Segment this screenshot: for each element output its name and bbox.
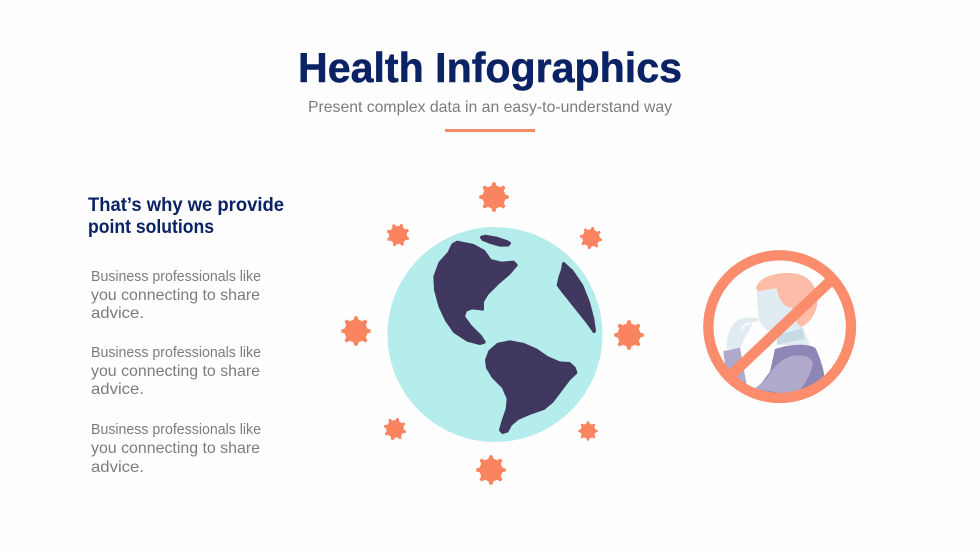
icon: virus left xyxy=(341,316,371,346)
icon: virus bottom xyxy=(476,455,506,485)
continent: greenland xyxy=(482,236,509,245)
text block 3 xyxy=(91,421,261,476)
prohibition slash xyxy=(732,280,831,374)
continent: north america xyxy=(435,242,516,343)
icon: virus top xyxy=(479,182,509,212)
title: Health Infographics xyxy=(298,44,682,91)
text block 1: Business professionals like xyxy=(91,268,261,285)
prohibition ring xyxy=(708,255,851,398)
icon: no-contact prohibition sign xyxy=(708,255,851,398)
icon: virus upper right xyxy=(578,225,604,251)
subtitle: Present complex data in an easy-to-understand way xyxy=(308,99,672,116)
title underline xyxy=(445,129,535,132)
heading: point solutions: That’s why we provide xyxy=(88,194,284,216)
continent: africa edge xyxy=(558,264,594,331)
icon: globe xyxy=(388,227,602,442)
text block 1: you connecting to share xyxy=(91,287,260,304)
icons: viruses around globe xyxy=(341,182,644,485)
icon: virus right xyxy=(614,320,644,350)
text block 3: you connecting to share xyxy=(91,440,260,457)
text block 2: you connecting to share xyxy=(91,363,260,380)
person illustration xyxy=(723,273,824,398)
text block 1: advice. xyxy=(91,305,144,322)
text block 2: advice. xyxy=(91,381,144,398)
text block 1 xyxy=(91,268,261,322)
heading: point solutions: point solutions xyxy=(88,216,214,238)
text block 3: advice. xyxy=(91,459,144,476)
text block 3: Business professionals like xyxy=(91,421,261,438)
text block 2 xyxy=(91,344,261,398)
text block 2: Business professionals like xyxy=(91,344,261,361)
heading: point solutions xyxy=(88,194,284,238)
icon: virus lower left xyxy=(381,415,409,443)
continent: south america xyxy=(487,342,576,432)
icon: virus lower right xyxy=(578,421,598,441)
panel: left text column xyxy=(88,194,284,476)
icon: virus upper left xyxy=(383,220,413,250)
